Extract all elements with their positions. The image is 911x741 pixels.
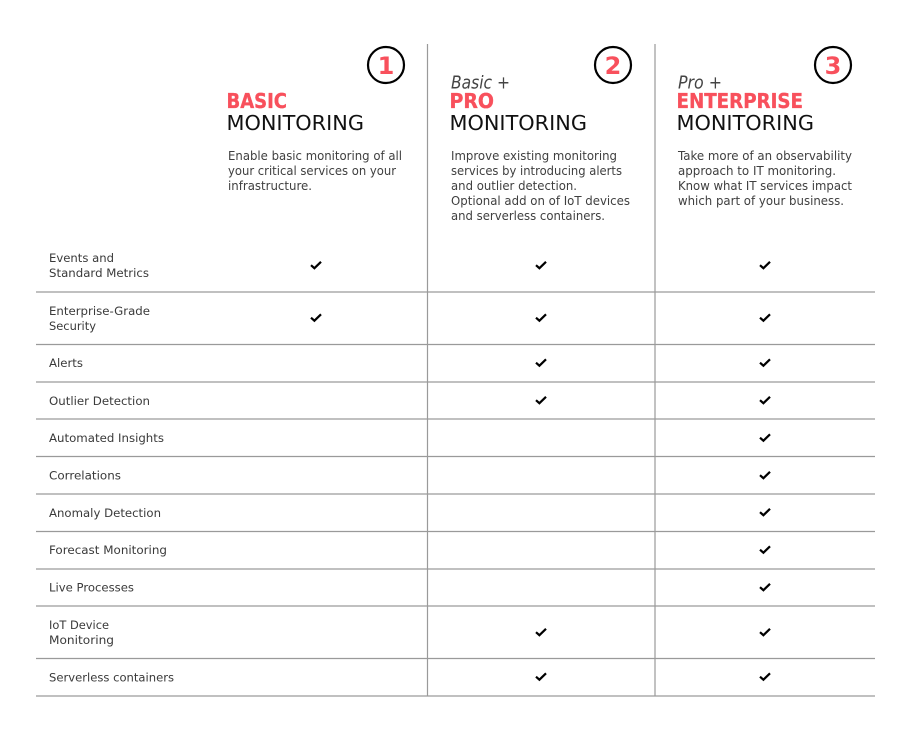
description: pro [451,149,630,223]
heading: basic plus pro monitoring: MONITORING [450,111,587,135]
feature row labels [49,251,174,684]
label: enterprise-grade security: Security [49,319,96,333]
heading: basic plus pro monitoring: PRO [450,89,494,113]
description: basic [228,149,402,193]
heading: basic plus pro monitoring: Basic + [451,74,510,94]
label: iot device monitoring [49,618,114,647]
label: events and standard metrics [49,251,149,280]
description: pro: and outlier detection. [451,179,577,193]
description: enterprise: approach to IT monitoring. [678,164,836,178]
column 1 header: basic [226,47,404,193]
label: enterprise-grade security: Enterprise-Grade [49,304,150,318]
description: pro: services by introducing alerts [451,164,622,178]
description: enterprise [677,149,852,208]
heading: basic plus pro monitoring [450,74,587,135]
label: alerts: Alerts [49,356,83,370]
label: events and standard metrics: Standard Metrics [49,266,149,280]
heading: basic monitoring [226,89,364,135]
description: basic: infrastructure. [228,179,312,193]
heading: basic monitoring: BASIC [226,89,287,113]
description: enterprise: which part of your business. [678,194,844,208]
number badge 2 [595,47,631,83]
column 3 header: enterprise [676,47,852,208]
column 2 header: pro [450,47,631,223]
number badge 2: 2 [605,52,621,80]
label: enterprise-grade security [49,304,150,333]
number badge 3: 3 [825,52,841,80]
heading: pro plus enterprise monitoring: Pro + [678,74,722,94]
description: basic: your critical services on your [228,164,396,178]
label: live processes: Live Processes [49,580,134,594]
heading: pro plus enterprise monitoring: ENTERPRISE [676,89,803,113]
checkmarks: basic column [311,262,321,321]
number badge 3 [815,47,851,83]
checkmarks: pro column [536,262,546,680]
label: iot device monitoring: Monitoring [49,633,114,647]
label: outlier detection: Outlier Detection [49,394,150,408]
label: serverless containers: Serverless containers [49,670,174,684]
description: basic: Enable basic monitoring of all [228,149,402,163]
description: enterprise: Know what IT services impact [678,179,852,193]
number badge 1 [368,47,404,83]
description: pro: and serverless containers. [451,209,605,223]
number badge 1: 1 [378,52,394,80]
heading: basic monitoring: MONITORING [226,111,364,135]
label: anomaly detection: Anomaly Detection [49,506,161,520]
label: forecast monitoring: Forecast Monitoring [49,543,167,557]
label: iot device monitoring: IoT Device [49,618,109,632]
description: enterprise: Take more of an observability [677,149,852,163]
description: pro: Improve existing monitoring [451,149,617,163]
label: automated insights: Automated Insights [49,431,164,445]
label: correlations: Correlations [49,468,121,482]
label: events and standard metrics: Events and [49,251,114,265]
heading: pro plus enterprise monitoring: MONITORING [676,111,814,135]
checkmarks: enterprise column [760,262,770,680]
description: pro: Optional add on of IoT devices [451,194,630,208]
heading: pro plus enterprise monitoring [676,74,814,135]
